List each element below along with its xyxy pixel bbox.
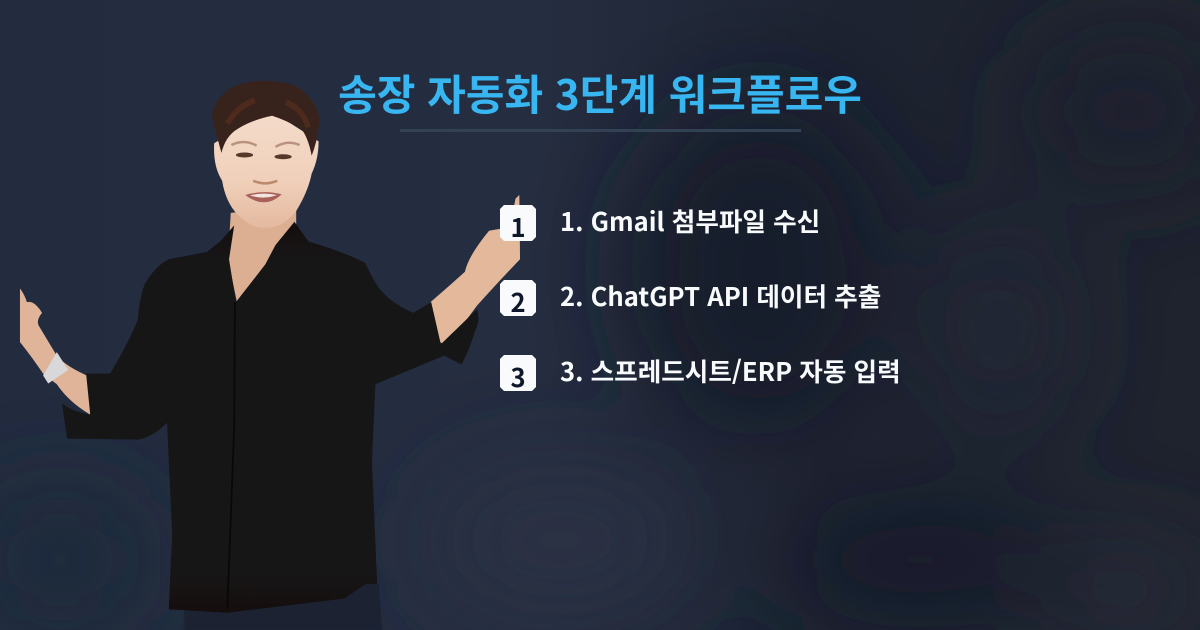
eyes [236, 152, 253, 157]
placket line [227, 302, 235, 609]
eyebrows [231, 142, 300, 147]
hair highlights [227, 100, 308, 127]
shirt [62, 222, 478, 613]
step badge 3 [500, 355, 536, 391]
title: 송장 자동화 3단계 워크플로우 [338, 62, 862, 123]
step badge 3: 3 [510, 358, 526, 395]
head and face [212, 81, 320, 228]
step badge 2 [500, 280, 536, 316]
title underline [400, 129, 801, 132]
hair [212, 81, 320, 156]
step badge 1 [500, 205, 536, 241]
step 3 text: 3. 스프레드시트/ERP 자동 입력 [560, 352, 901, 389]
nose [253, 181, 277, 183]
jeans [184, 584, 382, 630]
step 1 text: 1. Gmail 첨부파일 수신 [560, 202, 820, 239]
right forearm and hand [431, 195, 520, 345]
step badge 1: 1 [510, 208, 526, 245]
step 2 text: 2. ChatGPT API 데이터 추출 [560, 277, 881, 314]
mouth [245, 192, 282, 202]
step badge 2: 2 [510, 283, 526, 320]
neck [228, 206, 296, 302]
wristwatch [43, 352, 68, 384]
left forearm and hand [20, 289, 90, 415]
